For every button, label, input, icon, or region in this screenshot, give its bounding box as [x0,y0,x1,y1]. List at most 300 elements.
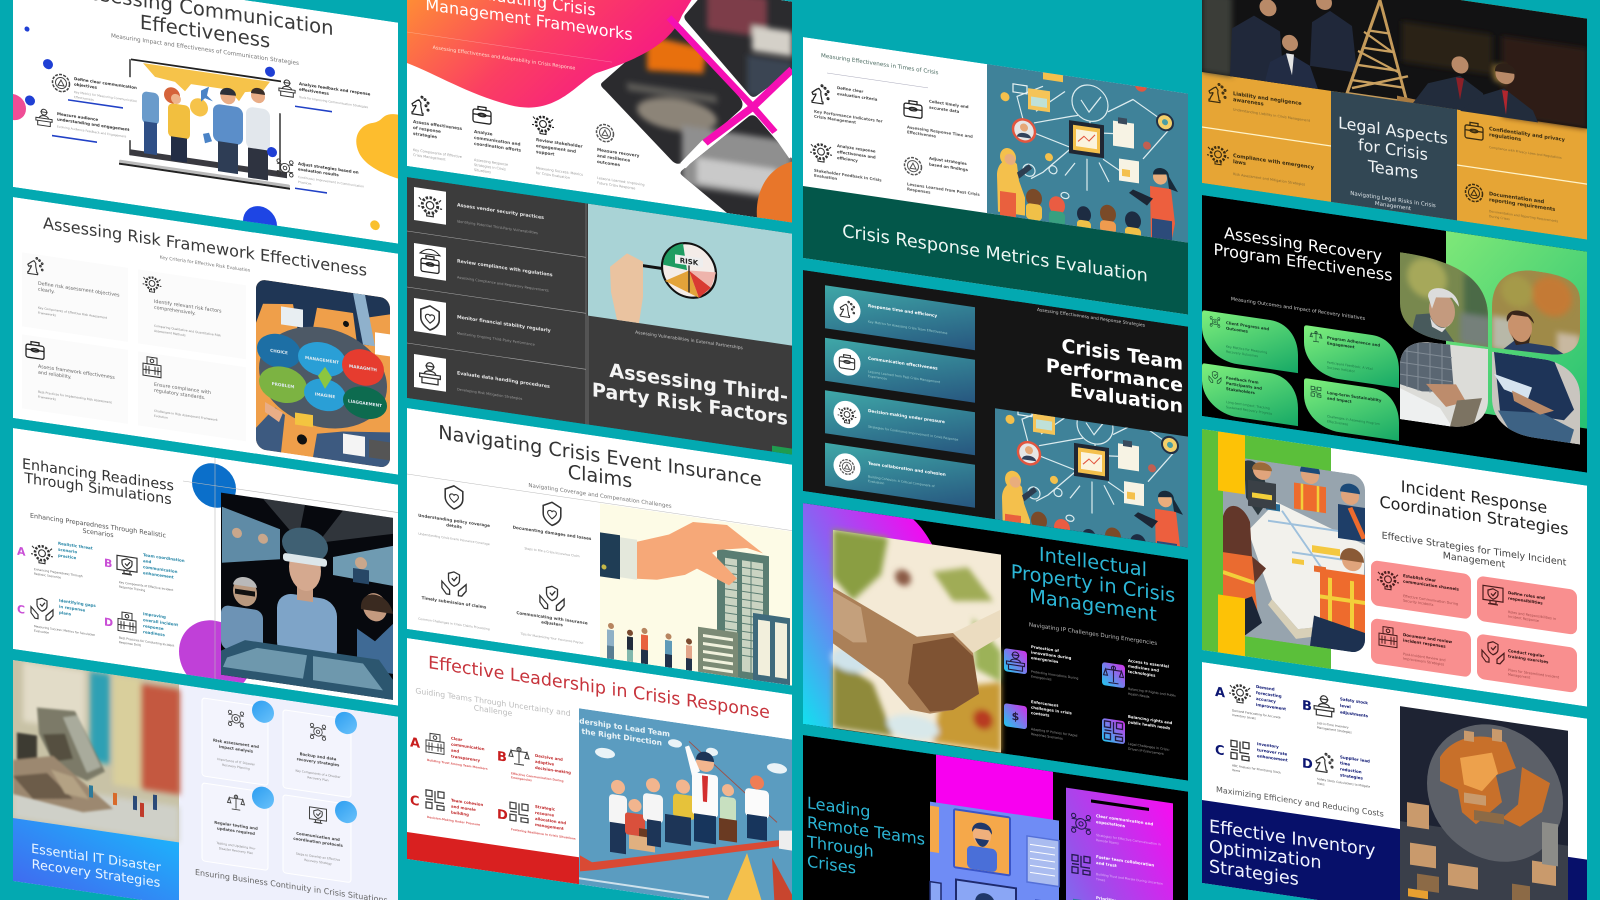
subtitle: Assessing Vulnerabilities in External Partnerships [635,330,744,351]
card: response time [825,285,975,350]
item D: resource [535,810,555,818]
title band [13,818,179,900]
heading: Evaluation [1070,378,1183,418]
item: define objectives: Key Metrics for Measuring Communication [74,90,137,103]
card: communication: Experiences [868,374,887,381]
slide: Assessing Recovery Program Effectiveness [1202,195,1587,473]
card: assess reliability: Frameworks [38,395,57,401]
image: handshake over map [831,529,1001,753]
item: define objectives: Define clear communication [74,76,137,90]
item: protection of innovations: Emergencies [1031,675,1052,682]
card: define objectives [27,257,120,319]
row: data handling: Developing Risk Mitigation Strategies [457,387,523,401]
item: enforcement: Response Scenarios [1031,732,1063,741]
item D: management [535,822,564,831]
row: vendor security: Assess vendor security practices [457,202,544,221]
card: feedback: Feedback from [1226,375,1259,385]
row: data handling [414,354,550,407]
card: identify factors: comprehensively. [154,305,196,317]
item D: D [104,615,113,630]
image: navy shirt with papers (bottom right) [1492,352,1580,445]
card: roles: Define roles and [1508,590,1545,600]
subtitle: Navigating Legal Risks in Crisis [1350,191,1436,209]
item: analyze response: Evaluation [814,173,837,181]
subtitle: Guiding Teams Through Uncertainty and [415,686,571,718]
item: adjust strategies: Adjust strategies based on [298,161,359,175]
illustration: laptop with team [119,58,290,190]
heading: Coordination Strategies [1380,492,1568,539]
image: plaid shirt (bottom left) [1400,336,1490,433]
item C: ABC Analysis for Prioritizing Stock [1232,763,1281,775]
item: policy coverage: Understanding policy coverage [418,513,490,528]
item: protection of innovations: innovations during [1031,650,1072,660]
item B: B [497,749,507,766]
item: define objectives: objectives [74,81,98,90]
item D: Risks [1317,781,1325,787]
item: communicating with adjusters: Tips for Maximizing Your Insurance Payout [520,632,584,645]
illustration: video call [930,802,1059,900]
row: compliance: Review compliance with regulations [457,258,553,278]
card: channels [1371,560,1471,620]
item: clear communication: Clear communication and [1096,813,1153,827]
card: roles: Roles and Responsibilities in [1508,610,1556,621]
item: adjust strategies: Practices [298,180,312,186]
card: risk assessment [202,692,274,786]
item: protection of innovations: Protecting Innovations During [1031,670,1078,680]
item: review stakeholders: engagement and [536,143,576,154]
card: decision-making [825,390,975,455]
image: hand lifting building [600,503,792,686]
row: financial stability: Monitor financial stability regularly [457,314,551,334]
row: data handling: Evaluate data handling procedures [457,370,550,390]
item A: A [1215,685,1226,701]
item A: accuracy [1256,696,1276,704]
item D [105,612,178,647]
item: collect data: Collect timely and [929,99,969,109]
row: financial stability [414,298,551,351]
item: define criteria: Key Performance Indicators for [814,109,883,124]
item D: response [143,623,164,631]
item: documentation: Documentation and [1489,191,1545,205]
item: emergency laws: Compliance with emergency [1233,153,1315,171]
card: identify factors: Comparing Qualitative and Quantitative Risk [154,324,221,338]
card: feedback: Sustained Recovery Progress [1226,405,1273,416]
item: access to medicines: Balancing IP Rights and Public [1128,687,1176,698]
card: assess reliability: Assess framework effectiveness [38,364,115,381]
item: confidentiality: regulations [1489,132,1521,143]
item B: B [104,556,112,571]
item: enforcement [1004,695,1077,743]
card: regular testing: updates required [217,826,255,836]
item: access to medicines [1102,654,1176,703]
slide: Effective Inventory Optimization Strategies [1202,662,1587,900]
subtitle: Enhancing Preparedness Through Realistic [30,512,166,540]
card: regular testing [202,778,274,871]
item: review stakeholders: Review stakeholder [536,137,583,149]
item: assess effectiveness: strategies [413,131,438,139]
image: magnifier on risk: RISK [680,256,699,267]
heading: Crisis Team [1062,334,1183,375]
item: define criteria: Define clear [837,85,863,94]
item A: transparency [451,753,480,763]
item: measure recovery: Lessons Learned: Improving [597,176,645,187]
card: regular testing: Testing and Updating Your [216,841,256,851]
item A: communication [451,741,485,751]
card: collaboration: Building Cohesion: A Critical Component of [868,475,936,488]
item: balancing rights: public health needs [1128,719,1171,731]
card: training: Plans for Streamlined Incident [1508,668,1560,680]
item: balancing rights: Driven IP Enforcement [1128,747,1165,756]
heading: Intellectual [1039,543,1147,582]
item A: Inventory Levels [1232,713,1256,720]
image: logistics globe [1400,706,1568,900]
item: analyze communication: Assessing Response [474,158,508,167]
card: define objectives: Key Components of Effective Risk Assessment [38,306,108,320]
row: vendor security [414,187,544,239]
item D: strategies [1340,772,1363,781]
row: compliance [414,243,553,296]
row: vendor security: Identifying Potential Third-Party Vulnerabilities [457,219,538,235]
slide: Enhancing Readiness Through Simulations [13,428,398,720]
item D: reduction [1340,766,1362,774]
item: adjust strategies [904,152,980,202]
item: foster collaboration: and trust [1096,860,1117,868]
heading: Crisis Response Metrics Evaluation [842,222,1148,287]
item: communicating with adjusters: Communicating with insurance [516,610,588,626]
illustration: team around plan table [1223,450,1365,654]
item: documentation: reporting requirements [1489,197,1555,213]
item D: Fostering Resilience in Crisis Situations [511,827,576,841]
heading: Recovery Strategies [32,857,161,891]
item A: practice [58,553,77,560]
image: magnifier on risk [588,204,792,346]
panel: key points [1066,788,1173,900]
heading: Property in Crisis [1011,560,1175,607]
item: access to medicines: Health Needs [1128,692,1150,699]
card: sustainability: Long-term Sustainability [1327,390,1382,403]
heading: Performance [1046,354,1183,397]
card: program adherence [1304,325,1399,388]
item: analyze feedback: Analyze feedback and response [299,81,371,97]
item B: Key Components of Effective Incident [119,580,174,592]
slide: Incident Response Coordination Strategies [1202,429,1587,707]
item: analyze communication: Analyze [474,129,493,137]
item: measure audience [25,96,130,143]
card: program adherence: Success Indicator [1327,365,1356,374]
card: define objectives: Define risk assessment objectives [38,281,120,299]
image: simulation room [221,493,393,700]
card: communication: coordination protocols [293,836,343,848]
item: review stakeholders: Measuring Success: Metrics [536,166,583,177]
heading: Enhancing Readiness [22,456,174,495]
item: clear communication: Strategies for Effective Communication in [1096,833,1161,847]
card: feedback: Participants and [1226,381,1262,391]
card: roles [1477,575,1577,635]
heading: Incident Response [1401,477,1547,517]
item D: Best Practices for Conducting Incident [119,636,175,648]
item: enforcement: contexts [1031,710,1050,718]
item: assess effectiveness: of response [413,125,441,134]
card: identify factors [142,276,222,336]
card: feedback: Long-term Impact: Tracking [1226,400,1270,410]
item: balancing rights [1102,710,1173,757]
item: emergency laws: laws [1233,159,1246,167]
item C: and morale [451,803,476,812]
card: channels: communication channels [1403,579,1459,592]
item: review stakeholders: for Crisis Evaluation [536,171,570,180]
subtitle: Measuring Effectiveness in Times of Crisis [821,53,939,76]
item C: building [451,809,469,817]
card: communication [283,792,357,884]
card: identify factors: Identify relevant risk factors [154,299,222,315]
item B [497,744,571,788]
subtitle: Challenge [474,703,512,718]
heading: Party Risk Factors [592,378,788,430]
card: identify factors: Assessment Methods [154,329,186,337]
heading: Legal Aspects [1338,113,1448,148]
image: team around management diagram: MARAGMTH [349,363,377,373]
item C: C [410,793,420,810]
item: define criteria: Crisis Management [814,114,856,125]
item C [18,598,96,636]
item: enforcement: Adapting IP Policies for Rapid [1031,727,1077,738]
item: measure audience: understanding and engagement [57,116,130,132]
card: program adherence: Program Adherence and [1327,335,1380,348]
item: analyze communication: communication and [474,135,520,147]
heading: Crises [807,852,856,878]
item: communicating with adjusters: adjusters [541,619,563,627]
card: document: incident responses [1403,638,1446,649]
card: training: Management [1508,672,1531,680]
card: channels: Effective Communication During [1403,594,1458,606]
item: documentation: During Crises [1489,214,1510,221]
card: communication: Recovery Strategy [304,858,332,866]
card: program adherence: Engagement [1327,340,1355,349]
subtitle: Measuring Outcomes and Impact of Recovery Initiatives [1231,296,1366,322]
item A: A [17,545,26,559]
item: analyze communication: coordination efforts [474,141,522,153]
card: ensure compliance [142,356,218,421]
item: emergency laws: Risk Assessment and Mitigation Strategies [1233,172,1305,187]
item: communicating with adjusters [516,581,588,646]
card: risk assessment: impact analysis [219,744,254,754]
image: team around management diagram [256,279,390,468]
item: adjust strategies: Continuous Improvement in Communication [298,175,364,189]
item: access to medicines: medicines and [1128,663,1159,673]
item A: Realistic Scenarios [34,572,62,580]
heading: Claims [568,460,632,493]
card: define objectives: clearly. [38,287,55,295]
row: compliance: Assessing Compliance and Regulatory Requirements [457,275,549,293]
item: liability [1209,82,1311,123]
item: protection of innovations: Protection of [1031,644,1059,653]
slide: Evaluating Crisis Management Frameworks [407,0,792,223]
card: backup: Key Components of a Disaster [295,769,341,779]
heading: Effective Leadership in Crisis Response [428,653,770,723]
item A [1215,678,1286,725]
card: communication: Lessons Learned from Past Crisis Management [868,370,941,384]
item: timely submission [418,567,490,631]
slide: Crisis Team Performance Evaluation [803,270,1188,568]
illustration: data network [995,380,1188,568]
item B: adaptive [535,759,555,767]
card: regular testing: Disaster Recovery Plan [219,846,253,855]
heading: Through [806,832,874,861]
heading: Program Effectiveness [1214,240,1392,285]
heading: Optimization [1209,837,1322,874]
item: define criteria [812,81,883,129]
item: enforcement: Enforcement [1031,699,1058,708]
item: define criteria: evaluation criteria [837,91,878,102]
item: foster collaboration: Building Trust and Morale During Uncertain [1096,872,1163,886]
item A: Demand Forecasting for Accurate [1232,708,1281,720]
item C: turnover rate [1257,747,1288,757]
image: photo tiles [597,0,792,223]
item C: plans [59,610,72,617]
item: assess effectiveness [412,95,462,164]
item D: Response Drills [119,640,142,647]
subtitle: Measuring Impact and Effectiveness of Communication Strategies [111,33,299,67]
subtitle: Assessing Effectiveness and Response Strategies [1037,307,1146,329]
card: sustainability: and Impact [1327,395,1352,404]
card: sustainability [1304,378,1399,441]
card: define objectives: Frameworks [38,311,57,317]
item: analyze feedback: Tools for Improving Communication Strategies [298,95,368,109]
item: analyze response: effectiveness and [837,149,876,160]
team figures [609,734,769,875]
item B: B [1302,698,1312,715]
heading: for Crisis [1358,135,1428,164]
item D: overall incident [143,617,178,627]
item: balancing rights: Legal Challenges in Crisis- [1128,742,1170,752]
item: adjust strategies: Lessons Learned from Past Crisis [907,181,980,197]
item: documenting damages: Steps to File a Crisis Insurance Claim [524,546,580,558]
item C [410,787,483,827]
slide: Assessing Communication Effectiveness [0,0,398,261]
item: analyze communication [473,106,522,179]
item: analyze feedback [265,66,370,112]
subtitle: Effective Strategies for Timely Incident [1382,530,1567,569]
slide: Navigating Crisis Event Insurance Claims [407,408,792,686]
card: sustainability: Effectiveness [1327,419,1349,427]
heading: Assessing Recovery [1224,223,1383,266]
item: collect data: Assessing Response Time and [907,124,973,139]
card: backup [283,703,357,799]
card: assess reliability: Best Practices for Implementing Risk Assessment [38,390,113,405]
card: client progress: Client Progress and [1226,320,1269,331]
image: team on arrow: Leadership to Lead Team [564,714,670,739]
item: clear communication: Remote Teams [1096,838,1119,845]
item: define objectives: Effectiveness [74,95,94,102]
card: training [1477,633,1577,693]
item D: readiness [143,629,166,637]
item: adjust strategies: Adjust strategies [929,156,967,166]
heading: Effective Inventory [1209,817,1375,861]
item: measure recovery: Future Crisis Response [597,181,635,191]
image: team around management diagram: PROBLEM [272,381,294,389]
subtitle: Key Criteria for Effective Risk Evaluation [160,255,250,274]
item: enforcement: $ [1012,710,1019,724]
subtitle: Scenarios [82,527,114,539]
heading: Assessing Third- [609,359,788,408]
subtitle: Assessing Effectiveness and Adaptability in Crisis Response [433,45,575,72]
item: liability: awareness [1233,97,1264,108]
item: liability: Understanding Liability in Crisis Management [1233,108,1311,123]
item D: time [1340,760,1350,767]
item A: Demand [1256,684,1275,692]
item: foster collaboration: Foster team collaboration [1096,854,1154,868]
card: document: Improvement Strategies [1403,657,1444,667]
pink cross [669,18,792,182]
item B [105,553,184,592]
card: client progress: Recovery Outcomes [1226,350,1258,358]
item: collect data [904,95,973,144]
card: program adherence: Participant Feedback: A Vital [1327,360,1373,371]
center panel [1331,91,1457,220]
item: policy coverage: details [446,522,462,530]
card: document: Document and review [1403,632,1452,644]
heading: Through Simulations [23,471,172,508]
item A: forecasting [1256,690,1282,699]
item: analyze communication: Strategies in Crisis [474,163,506,172]
item: balancing rights: Balancing rights and [1128,714,1173,725]
item C: enhancement [1257,753,1288,763]
card: assess reliability [25,340,114,404]
item B: level [1340,703,1351,709]
card: sustainability: Challenges in Assessing Program [1327,414,1380,426]
item: measure recovery [596,123,645,192]
image: team around management diagram: IMAGINE [315,391,335,399]
item D: Strategic [535,804,556,812]
item A: Realistic threat [58,541,93,551]
slide: Assessing Third-Party Risk Factors [407,177,792,455]
item C [1215,735,1288,780]
image: team around management diagram: CHOICE [270,348,288,355]
card: feedback [1202,363,1298,426]
image: team around management diagram: MANAGEMENT [305,355,339,365]
footer bar [407,832,579,884]
item: adjust strategies [267,147,364,194]
image: executives around wooden tower [1202,0,1587,130]
item: clear communication: expectations [1096,819,1126,828]
item D: Safety Stock Calculations to Mitigate [1317,777,1370,789]
item: analyze response: efficiency [837,155,858,163]
item B: Decisive and [535,753,563,762]
item A: Building Trust Among Team Members [427,758,488,771]
card: ensure compliance: Ensure compliance with [154,382,211,396]
card: channels: Establish clear [1403,573,1436,583]
item A [17,542,93,578]
subtitle: Maximizing Efficiency and Reducing Costs [1216,785,1384,819]
slide: Effective Leadership in Crisis Response [407,638,792,900]
item B: Effective Communication During [511,771,564,783]
item: measure recovery: outcomes [597,159,620,167]
item: documenting damages [513,497,592,560]
card: client progress: Outcomes [1226,326,1249,334]
card: collaboration: Team collaboration and cohesion [868,461,946,477]
item: timely submission: Timely submission of claims [422,595,487,610]
subtitle: Navigating Coverage and Compensation Challenges [528,483,672,510]
item C: Evaluation [34,629,49,635]
title band [803,186,1188,315]
item A: improvement [1256,702,1286,711]
card: document [1371,618,1471,678]
item B: Emergencies [511,775,532,782]
item: adjust strategies: evaluation results [298,166,339,177]
item C: Decision-Making Under Pressure [427,815,480,827]
item D: Improving [143,611,166,619]
item: documentation [1466,183,1559,228]
